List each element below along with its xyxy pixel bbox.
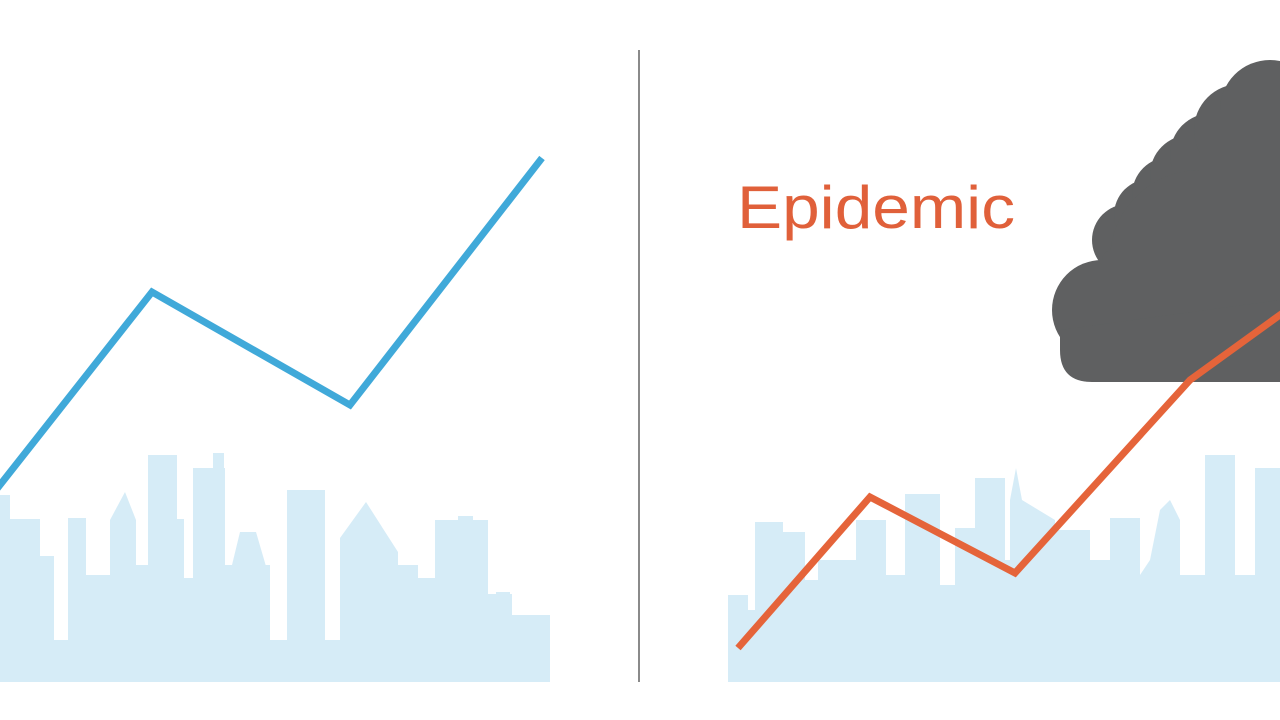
skyline: right city: [728, 455, 1280, 682]
chart line: orange epidemic: [738, 312, 1280, 648]
skyline: left city: [0, 453, 550, 682]
divider line: [638, 50, 640, 682]
icon: storm cloud: [1052, 60, 1280, 382]
chart line: blue growth: [0, 158, 542, 490]
title: Epidemic: Epidemic: [737, 174, 1015, 241]
